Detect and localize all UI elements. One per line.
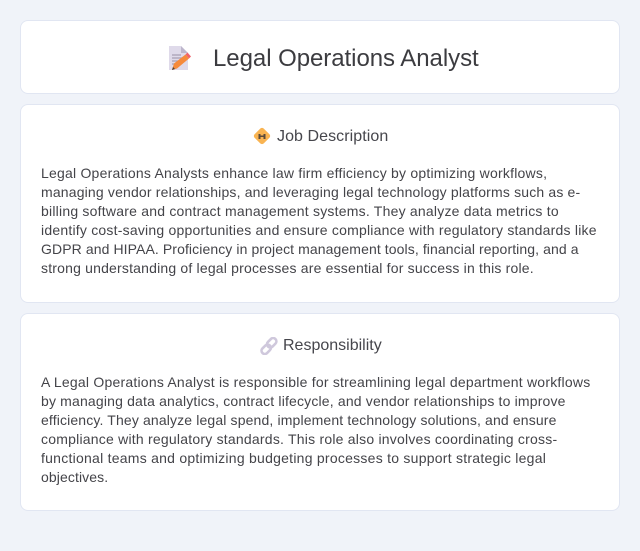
heading: responsibility: Responsibility [283,337,382,354]
panel: title card [20,20,620,94]
text block: responsibility [41,374,590,485]
text block: responsibility: by managing data analytics, contract lifecycle, and vendor relationships to improve [41,393,566,409]
text block: job description: GDPR and HIPAA. Proficiency in project management tools, financial reporting, and a [41,241,579,257]
icon: document with pencil [169,46,191,70]
text block: job description: managing vendor relationships, and leveraging legal technology platforms such as e- [41,184,580,200]
icon: orange diamond [254,128,270,144]
text block: job description: identify cost-saving opportunities and ensure compliance with regulatory standards like [41,222,597,238]
text block: responsibility: A Legal Operations Analyst is responsible for streamlining legal department workflows [41,374,590,390]
text block: responsibility: efficiency. They analyze legal spend, implement technology solutions, and ensure [41,412,557,428]
text block: job description: billing software and contract management systems. They analyze data metrics to [41,203,559,219]
text block: responsibility: objectives. [41,469,108,485]
text block: job description [41,165,597,276]
icon: chain link [260,337,278,355]
text block: responsibility: compliance with regulatory standards. This role also involves coordinating cross- [41,431,557,447]
panel: job description [20,104,620,303]
text block: job description: strong understanding of legal processes are essential for success in this role. [41,260,534,276]
heading: job description: Job Description [277,128,388,145]
title: Legal Operations Analyst [213,45,479,72]
panel: responsibility [20,313,620,511]
text block: job description: Legal Operations Analysts enhance law firm efficiency by optimizing workflows, [41,165,547,181]
text block: responsibility: functional teams and optimizing budgeting processes to support strategic legal [41,450,546,466]
